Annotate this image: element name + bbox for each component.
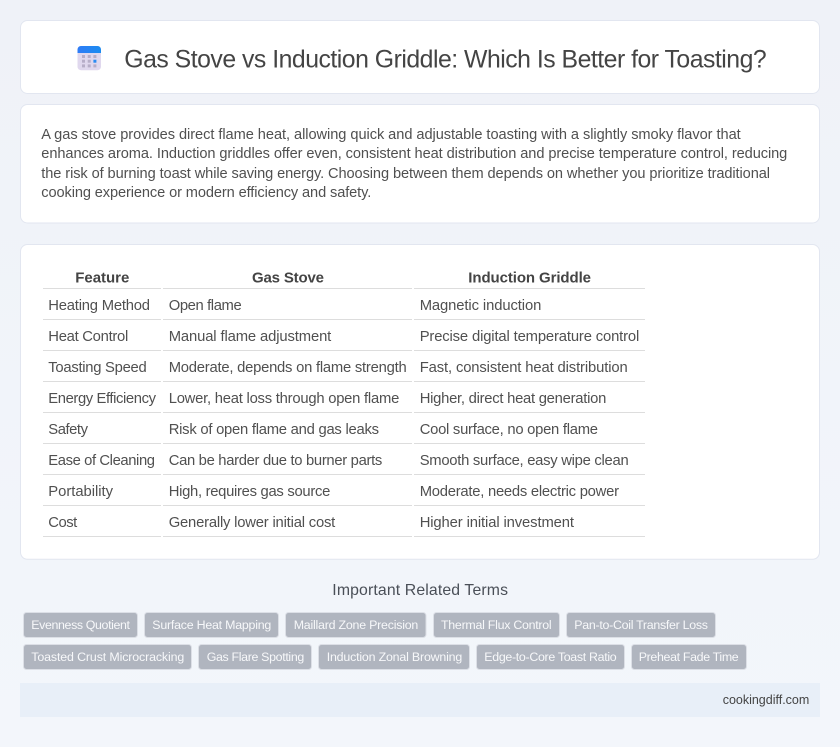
tag: Maillard Zone Precision: Maillard Zone Precision (294, 618, 418, 632)
tag: Preheat Fade Time (632, 644, 746, 670)
intro paragraph: the risk of burning toast while saving energy. Choosing between them depends on whether you prioritize traditional (41, 166, 770, 182)
row: toasting speed: Fast, consistent heat distribution (420, 360, 628, 376)
panel: comparison table (20, 244, 820, 559)
row: portability: High, requires gas source (169, 484, 330, 500)
related terms tags (24, 612, 746, 670)
tag: Maillard Zone Precision (286, 612, 426, 638)
tag: Edge-to-Core Toast Ratio: Edge-to-Core Toast Ratio (484, 650, 617, 664)
tag: Thermal Flux Control: Thermal Flux Control (441, 618, 552, 632)
row: energy efficiency: Higher, direct heat generation (420, 391, 606, 407)
row: safety: Cool surface, no open flame (420, 422, 598, 438)
intro paragraph: cooking experience or modern efficiency and safety. (41, 185, 371, 201)
row: safety (48, 422, 598, 438)
row: energy efficiency: Lower, heat loss through open flame (169, 391, 399, 407)
row: safety: Safety (48, 422, 89, 438)
row: toasting speed (48, 360, 628, 376)
table header row: Feature (75, 269, 129, 286)
tag: Pan-to-Coil Transfer Loss (566, 612, 716, 638)
intro paragraph: enhances aroma. Induction griddles offer even, consistent heat distribution and precise temperature control, reducing (41, 146, 787, 162)
row: portability (48, 484, 619, 500)
tag: Induction Zonal Browning: Induction Zonal Browning (327, 650, 462, 664)
row: heat control: Manual flame adjustment (169, 329, 331, 345)
row: portability: Moderate, needs electric power (420, 484, 619, 500)
row: energy efficiency: Energy Efficiency (48, 391, 157, 407)
tag: Toasted Crust Microcracking: Toasted Crust Microcracking (31, 650, 184, 664)
tag: Preheat Fade Time: Preheat Fade Time (639, 650, 739, 664)
tag: Gas Flare Spotting (198, 644, 312, 670)
footer bar (20, 683, 820, 717)
row: portability: Portability (48, 484, 114, 500)
row: ease of cleaning: Ease of Cleaning (48, 453, 155, 469)
tag: Toasted Crust Microcracking (24, 644, 192, 670)
row: cost: Generally lower initial cost (169, 515, 335, 531)
title heading: Gas Stove vs Induction Griddle: Which Is Better for Toasting? (124, 46, 767, 73)
row: ease of cleaning: Can be harder due to burner parts (169, 453, 382, 469)
intro paragraph: A gas stove provides direct flame heat, allowing quick and adjustable toasting with a slightly smoky flavor that (41, 127, 741, 143)
tag: Induction Zonal Browning (318, 644, 470, 670)
row: energy efficiency (48, 391, 606, 407)
row: heating method: Heating Method (48, 298, 150, 314)
row: cost: Higher initial investment (420, 515, 574, 531)
intro paragraph (41, 127, 787, 201)
footer source text: cookingdiff.com (723, 693, 809, 707)
row: toasting speed: Moderate, depends on flame strength (169, 360, 407, 376)
tag: Evenness Quotient (24, 612, 138, 638)
row: ease of cleaning: Smooth surface, easy wipe clean (420, 453, 629, 469)
tag: Pan-to-Coil Transfer Loss: Pan-to-Coil Transfer Loss (574, 618, 708, 632)
row: heat control: Precise digital temperature control (420, 329, 639, 345)
related terms heading: Important Related Terms (332, 582, 508, 599)
table header row: Induction Griddle (468, 269, 591, 286)
tag: Surface Heat Mapping (144, 612, 278, 638)
row: ease of cleaning (48, 453, 629, 469)
tag: Surface Heat Mapping: Surface Heat Mapping (152, 618, 271, 632)
row: heating method: Open flame (169, 298, 242, 314)
row: heat control (48, 329, 639, 345)
icon: calendar (78, 46, 101, 70)
row: heating method (48, 298, 541, 314)
row: toasting speed: Toasting Speed (48, 360, 147, 376)
panel: title (20, 20, 820, 94)
row: heating method: Magnetic induction (420, 298, 541, 314)
tag: Gas Flare Spotting: Gas Flare Spotting (207, 650, 304, 664)
table header row: Gas Stove (252, 269, 324, 286)
panel: intro text (20, 104, 820, 223)
table header row (75, 269, 591, 286)
tag: Thermal Flux Control (434, 612, 560, 638)
tag: Edge-to-Core Toast Ratio (476, 644, 624, 670)
tag: Evenness Quotient: Evenness Quotient (31, 618, 131, 632)
row: heat control: Heat Control (48, 329, 128, 345)
row: safety: Risk of open flame and gas leaks (169, 422, 379, 438)
row: cost: Cost (48, 515, 77, 531)
row: cost (48, 515, 574, 531)
